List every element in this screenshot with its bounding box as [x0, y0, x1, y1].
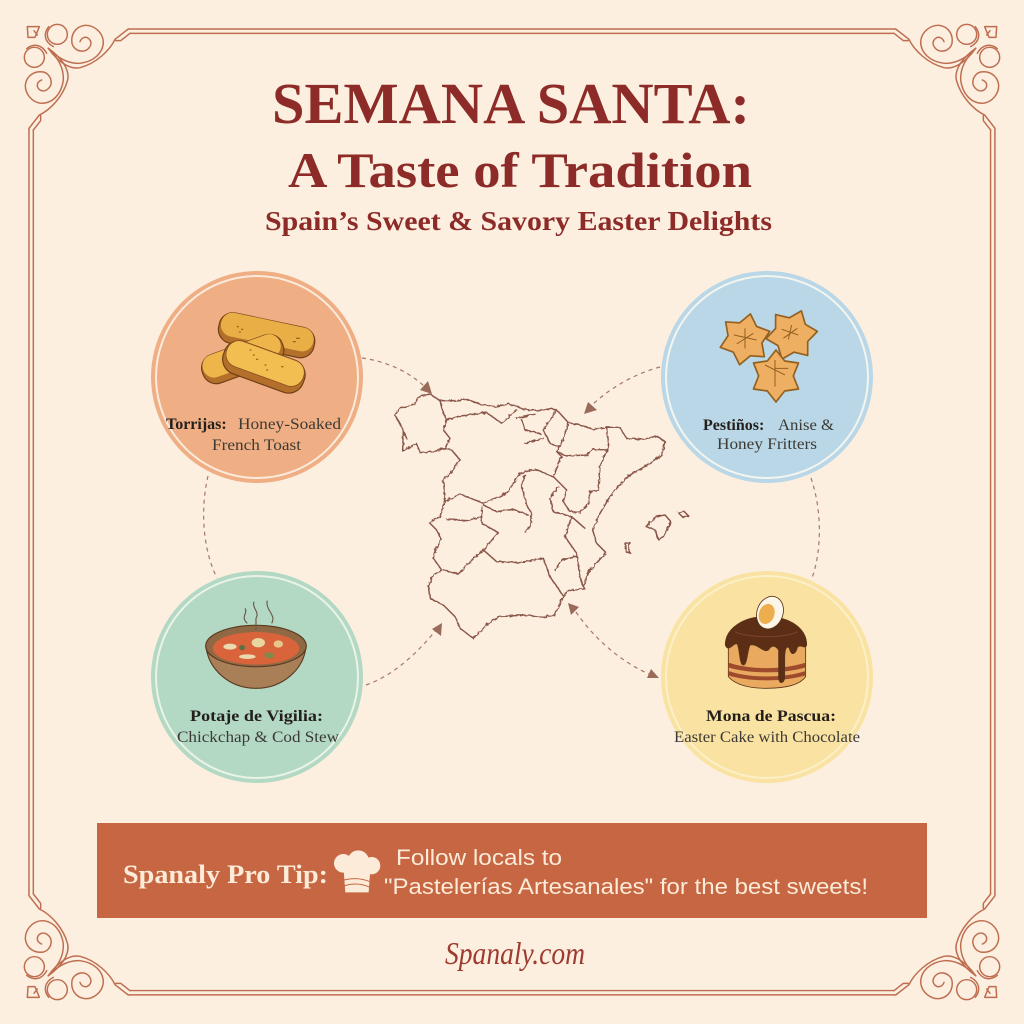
connecting dashed arrows: [204, 358, 819, 685]
arrow: torrijas to map: [362, 358, 432, 394]
label: Potaje de Vigilia:: [190, 708, 323, 725]
circle inner ring: [666, 276, 868, 478]
tip banner: [97, 823, 927, 918]
arrow: potaje to map: [366, 623, 442, 685]
label: French Toast: [212, 437, 302, 454]
circle inner ring: [156, 276, 358, 478]
circle background: [661, 271, 873, 483]
balearic islands: [625, 511, 689, 553]
arrow: mona to map, double ended: [568, 603, 659, 678]
panel: torrijas: [151, 271, 363, 483]
label: Mona de Pascua:: [706, 708, 836, 725]
corner flourish: bottom left: [24, 894, 130, 1000]
label: Honey Fritters: [717, 436, 817, 453]
arrow: pestiños to map: [584, 367, 660, 414]
panel: potaje de vigilia: [151, 571, 363, 783]
banner heading: Spanaly Pro Tip:: [123, 860, 328, 889]
circle inner ring: [666, 576, 868, 778]
icon: chef hat: [334, 850, 380, 892]
corner flourish: top right: [894, 24, 1000, 130]
title line one: SEMANA SANTA:: [272, 71, 750, 136]
label: Honey-Soaked: [238, 416, 341, 433]
mainland coastline: [395, 394, 665, 638]
title line two: A Taste of Tradition: [288, 142, 752, 198]
panel: pestiños: [661, 271, 873, 483]
label: Anise &: [778, 417, 835, 434]
corner flourish: top left: [24, 24, 130, 130]
panel: mona de pascua: [661, 571, 873, 783]
dashed arc: left side: [204, 476, 217, 578]
label: Easter Cake with Chocolate: [674, 729, 860, 746]
circle background: [151, 271, 363, 483]
icon: stew bowl: [206, 601, 306, 688]
tip text line two: "Pastelerías Artesanales" for the best sweets!: [384, 874, 868, 899]
label: Torrijas:: [166, 416, 227, 433]
icon: torrijas toast: [198, 310, 317, 397]
banner background: [97, 823, 927, 918]
corner flourish: bottom right: [894, 894, 1000, 1000]
icon: pestiños stars: [718, 302, 822, 402]
tip text line one: Follow locals to: [396, 845, 562, 870]
label: Pestiños:: [703, 417, 764, 434]
subtitle: Spain’s Sweet & Savory Easter Delights: [265, 206, 772, 236]
footer brand: Spanaly.com: [445, 935, 585, 971]
circle background: [151, 571, 363, 783]
circle inner ring: [156, 576, 358, 778]
map of Spain: [395, 394, 689, 638]
label: Chickchap & Cod Stew: [177, 729, 339, 746]
dashed arc: right side: [811, 478, 819, 578]
regional borders: [400, 401, 608, 596]
circle background: [661, 571, 873, 783]
title block: [265, 71, 772, 236]
icon: easter cake: [725, 593, 807, 688]
